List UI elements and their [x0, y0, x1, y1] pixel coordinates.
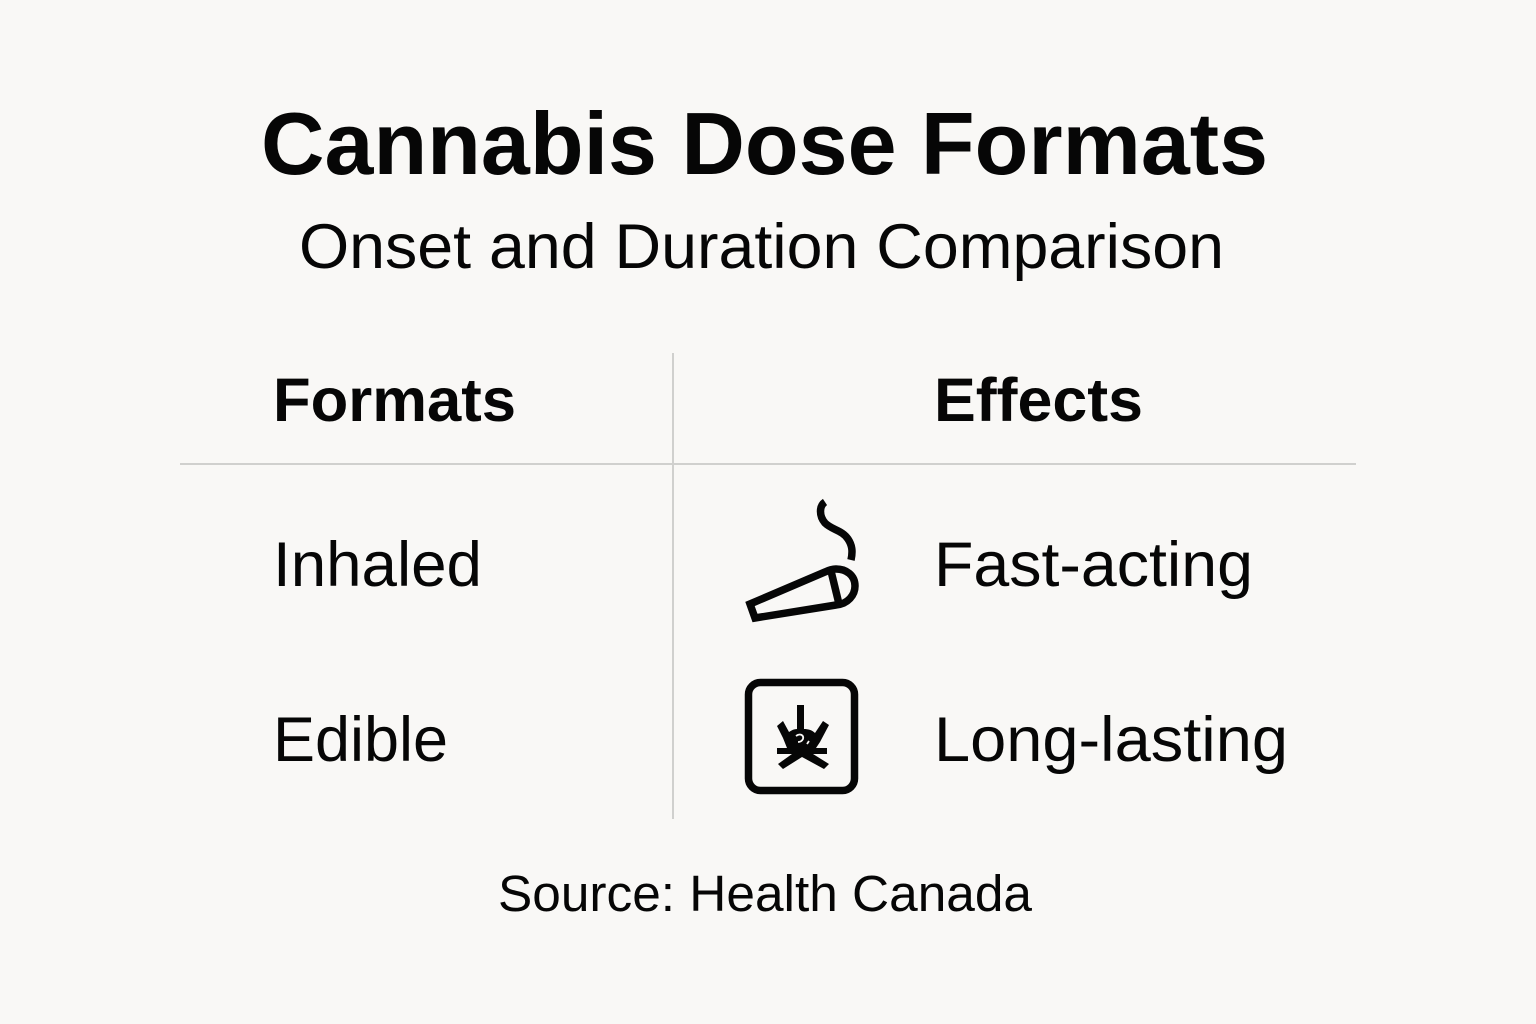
title: Cannabis Dose Formats: [261, 94, 1268, 193]
source note: Source: Health Canada: [498, 865, 1033, 922]
icon: joint with smoke: [750, 502, 855, 618]
row label: edible: Edible: [273, 705, 448, 775]
row effect: long-lasting: Long-lasting: [934, 705, 1288, 775]
subtitle: Onset and Duration Comparison: [299, 212, 1224, 282]
column heading: formats: Formats: [273, 366, 516, 434]
icon: edible package with cannabis leaf: [748, 682, 854, 790]
column heading: effects: Effects: [934, 366, 1143, 434]
comparison table: [273, 366, 1288, 790]
row effect: fast-acting: Fast-acting: [934, 530, 1253, 600]
row label: inhaled: Inhaled: [273, 530, 482, 600]
